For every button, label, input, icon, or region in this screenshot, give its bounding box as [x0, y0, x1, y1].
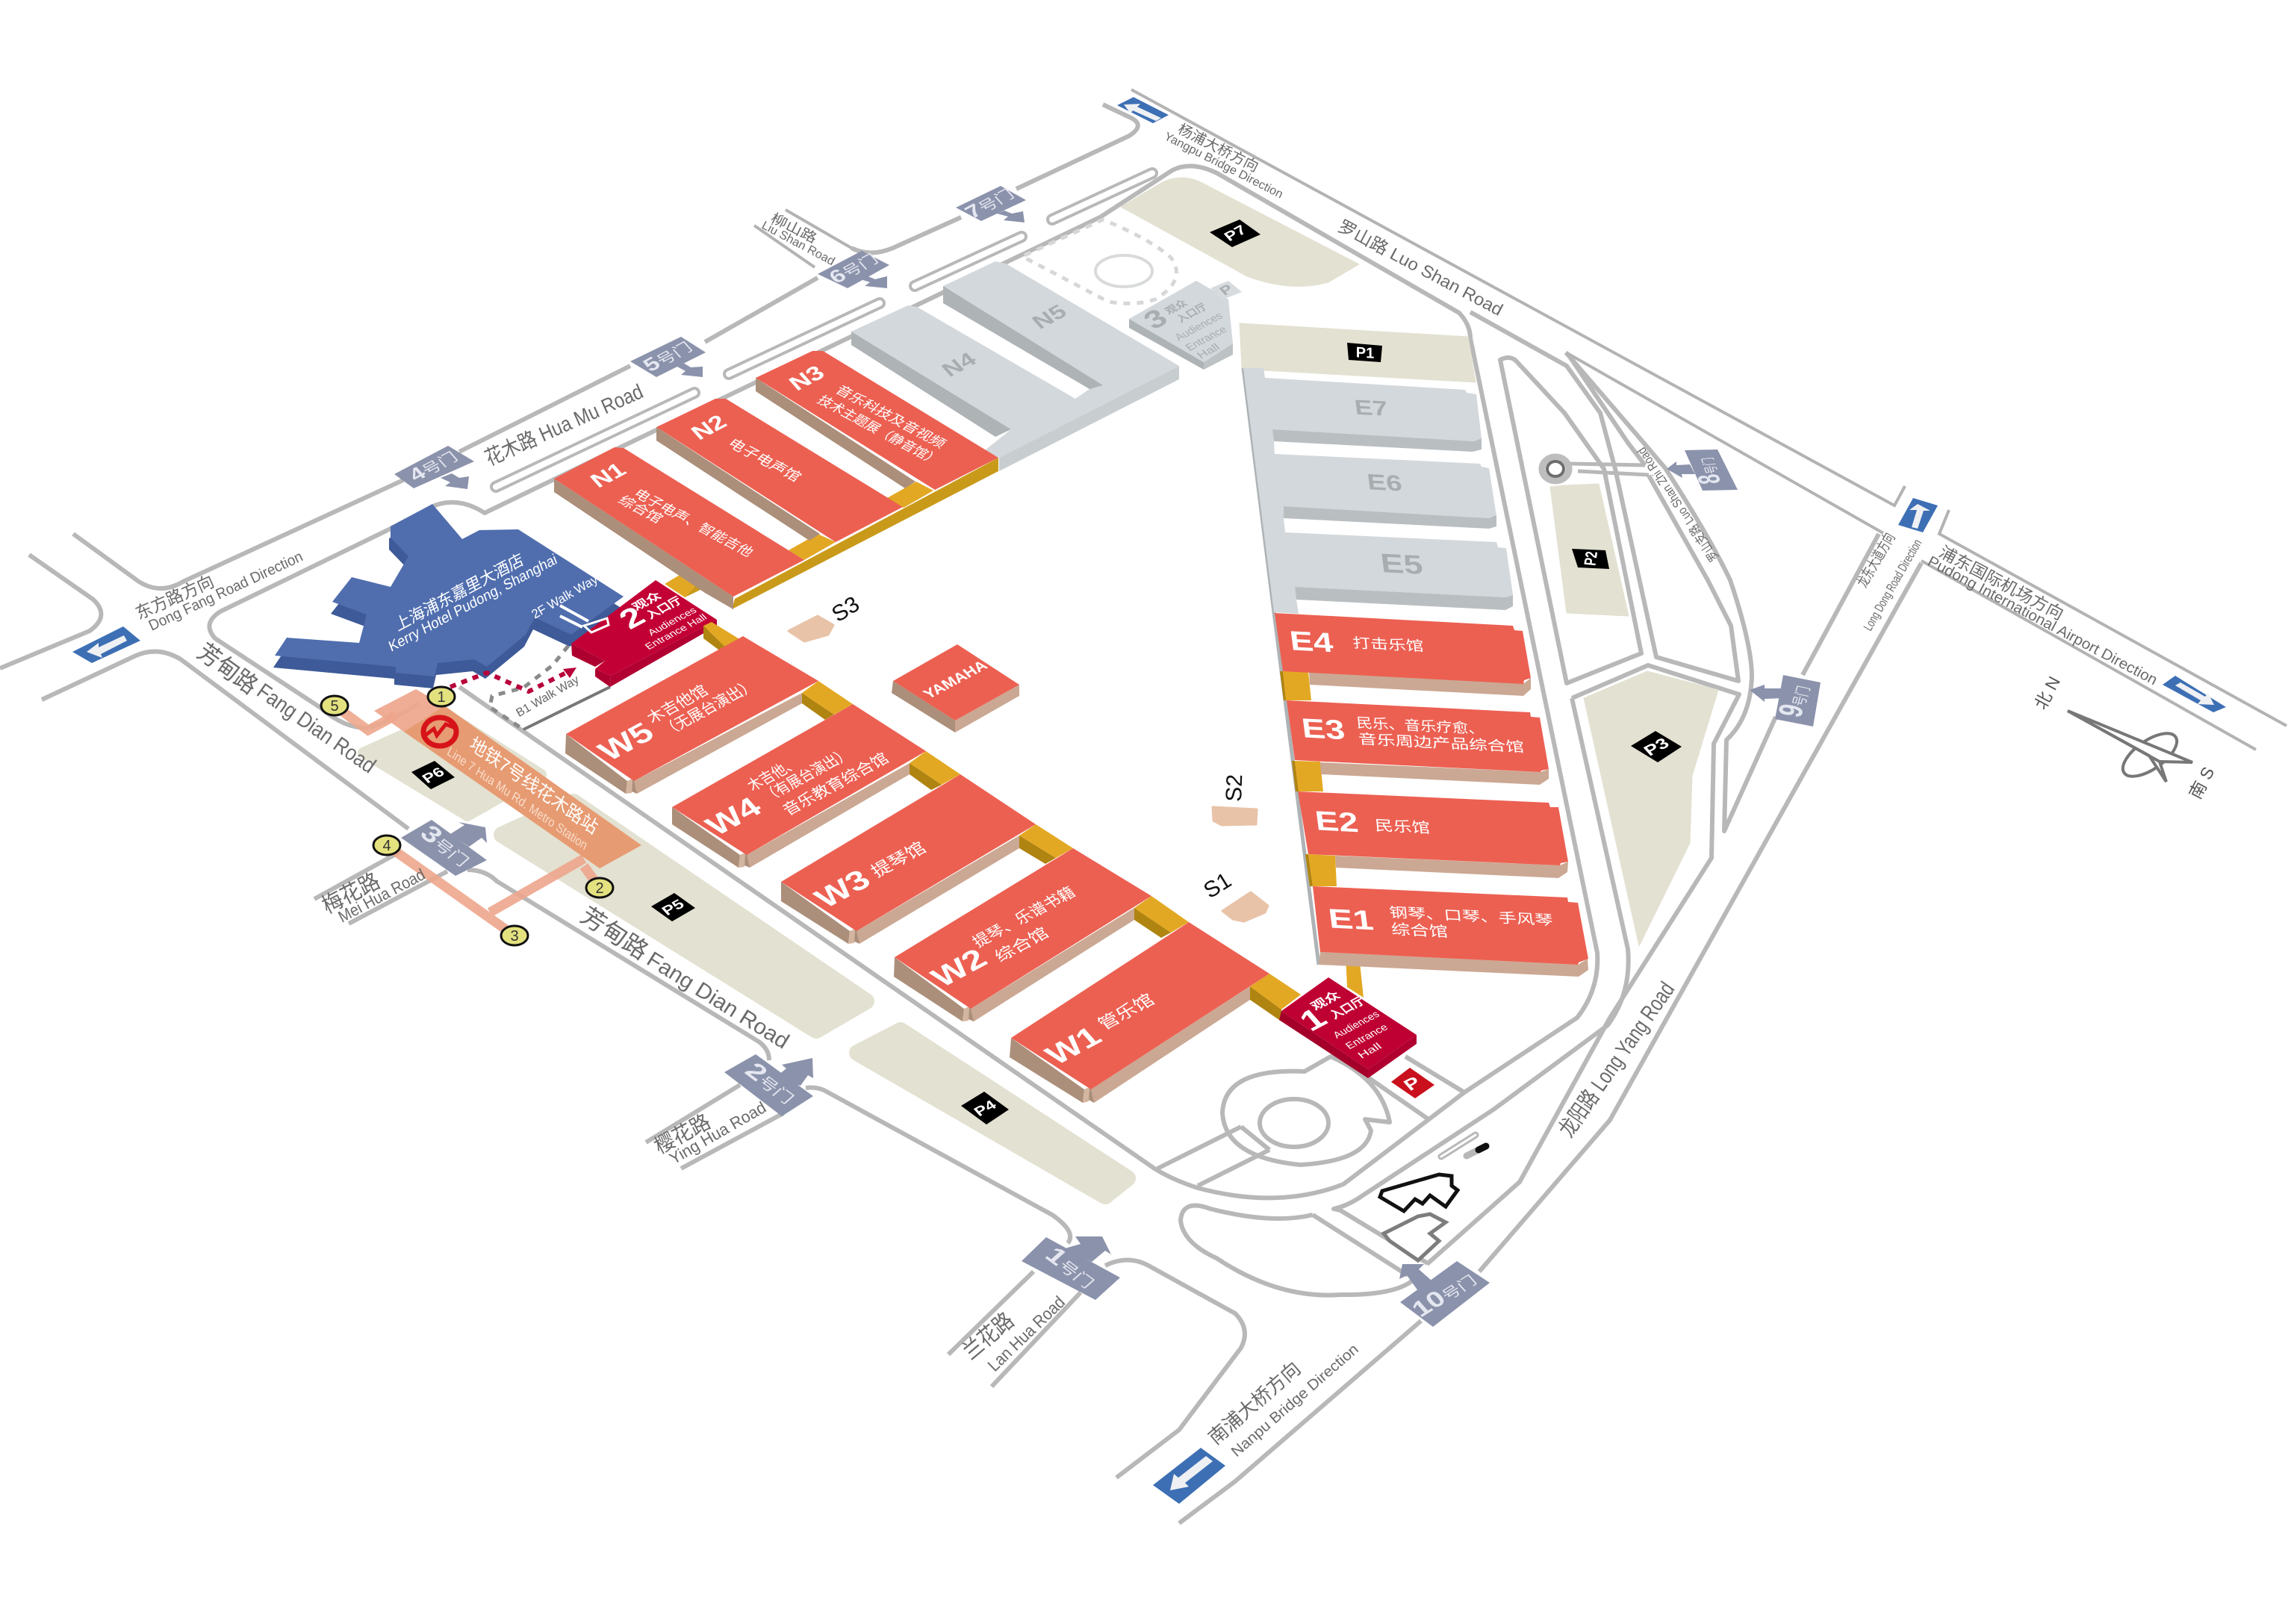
road label: Pudong Airport direction: Pudong International Airport Direction	[1925, 553, 2160, 688]
subway exit 3	[501, 926, 528, 945]
gate 2: 2号门	[739, 1057, 803, 1108]
gate 4	[394, 446, 474, 489]
stage S3	[789, 592, 864, 641]
entrance hall 3	[1129, 281, 1242, 370]
stair icon	[584, 618, 609, 632]
gate 3	[401, 820, 487, 876]
N1 label: N1	[585, 458, 631, 492]
hall 2 English line 2: Entrance Hall	[643, 612, 709, 652]
N4 label: N4	[937, 348, 981, 381]
road label: Yangpu Bridge direction: 杨浦大桥方向	[1175, 121, 1261, 175]
east corridor links	[1280, 671, 1337, 886]
subway exit 4: 4	[382, 838, 391, 854]
hall W5	[565, 636, 818, 794]
gate 5: 5号门	[638, 336, 697, 376]
hall 2 English: Audiences	[646, 606, 699, 638]
hall E2	[1298, 791, 1568, 878]
north label: 北 N	[2030, 673, 2064, 712]
N3 label: N3	[784, 361, 830, 395]
red parking sign	[1391, 1068, 1434, 1098]
hall N2	[656, 399, 903, 542]
station name: 地铁7号线花木路站	[466, 733, 601, 839]
road label: Nanpu Bridge direction: Nanpu Bridge Direction	[1228, 1341, 1362, 1460]
parking sign P3	[1631, 731, 1682, 762]
parking sign P5	[651, 893, 695, 921]
hall 1 title line 2: 入口厅	[1327, 995, 1367, 1021]
hall 1 title: 观众	[1308, 989, 1343, 1012]
hall 3 title line 2: 入口厅	[1174, 301, 1210, 325]
W2 theme line 2: 综合馆	[991, 924, 1052, 965]
hall E1	[1313, 886, 1588, 977]
small parking bays	[1441, 1135, 1486, 1157]
compass	[2030, 673, 2218, 802]
E3 label: E3	[1300, 712, 1346, 745]
stage S1: S1	[1199, 868, 1236, 903]
gate 6: 6号门	[824, 248, 883, 287]
hall W3	[781, 774, 1036, 944]
road label: Fang Dian Road east: 芳甸路	[576, 902, 653, 965]
E3 theme: 民乐、音乐疗愈、	[1356, 715, 1485, 737]
gate 3: 3号门	[414, 820, 479, 871]
road label: Fang Dian Road east	[576, 902, 793, 1054]
subway exit 1: 1	[437, 689, 446, 706]
B1 walkway	[450, 646, 610, 729]
road label: Lan Hua Road	[958, 1292, 1069, 1375]
hall W4	[672, 704, 926, 868]
parking P5	[502, 802, 866, 1030]
halls E5 E6 E7	[1243, 368, 1513, 614]
W2 label: W2	[924, 943, 994, 993]
road label: Dong Fang Road direction: Dong Fang Road Direction	[146, 549, 305, 635]
W3 label: W3	[808, 864, 877, 914]
E3 theme line 2: 音乐周边产品综合馆	[1358, 732, 1525, 755]
N5 label: N5	[1028, 300, 1072, 333]
parking sign P6: P6	[419, 765, 448, 786]
direction arrow: Nanpu Bridge	[1153, 1448, 1225, 1504]
E7 label: E7	[1353, 396, 1389, 420]
parking sign P5: P5	[659, 897, 688, 918]
subway exit 1	[428, 687, 455, 706]
hall 3 number: 3	[1137, 303, 1174, 335]
hall N4 N5	[851, 261, 1179, 471]
road label: Fang Dian Road east: Fang Dian Road	[642, 948, 793, 1054]
road label: Liu Shan Road: Liu Shan Road	[759, 220, 836, 268]
entrance hall 2	[571, 580, 717, 687]
parking sign P2	[1572, 549, 1609, 569]
road label: Long Dong direction: 龙东大道方向	[1853, 530, 1898, 590]
gate 1: 1号门	[1039, 1242, 1104, 1292]
hall N3	[756, 351, 998, 490]
gate 10: 10号门	[1407, 1266, 1482, 1322]
E1 label: E1	[1326, 903, 1375, 936]
station hall	[404, 706, 641, 868]
E2 label: E2	[1314, 805, 1360, 838]
parking P6	[363, 715, 541, 816]
median capsules along Hua Mu Road	[496, 173, 1152, 487]
road label: Luo Shan Road: 罗山路 Luo Shan Road	[1335, 216, 1506, 320]
gate 8	[1667, 449, 1738, 491]
parking P2	[1550, 484, 1629, 616]
hall 1 English line 3: Hall	[1355, 1041, 1384, 1061]
stage S2	[1213, 774, 1257, 825]
hall E3	[1287, 700, 1549, 785]
gate 4: 4号门	[404, 446, 462, 485]
subway exit 2: 2	[595, 880, 604, 897]
road label: Hua Mu Road: 花木路 Hua Mu Road	[482, 379, 647, 470]
road label: Long Dong direction: Long Dong Road Direction	[1861, 537, 1924, 633]
direction arrow: Yangpu Bridge	[1117, 97, 1169, 123]
direction arrow: Pudong Airport	[2163, 676, 2226, 712]
entrance hall 1	[1279, 977, 1417, 1078]
gate 2	[724, 1054, 813, 1116]
parking sign P7: P7	[1221, 223, 1250, 244]
gate 1	[1022, 1236, 1120, 1300]
south label: 南 S	[2185, 764, 2218, 802]
hall 3 title: 观众	[1163, 297, 1190, 317]
building outline: grey	[1384, 1214, 1446, 1260]
plaza circle and dashed path	[1025, 220, 1176, 303]
W4 theme line 3: 音乐教育综合馆	[780, 750, 892, 818]
east hall spine wall	[1243, 368, 1319, 965]
E4 label: E4	[1288, 625, 1335, 658]
stage S2: S2	[1222, 774, 1247, 802]
road label: Lan Hua Road: Lan Hua Road	[983, 1292, 1069, 1375]
connector E1 to entrance 1	[1346, 954, 1364, 998]
hall 1 English line 2: Entrance	[1343, 1022, 1390, 1051]
hall 2 number: 2	[612, 601, 652, 635]
W5 theme line 2: （无展台演出）	[658, 676, 759, 739]
parking sign P7	[1210, 220, 1260, 247]
gate 8: 8号门	[1686, 456, 1728, 485]
hall N1	[554, 447, 804, 609]
W1 label: W1	[1039, 1021, 1108, 1071]
W4 label: W4	[699, 791, 768, 841]
hotel name: 上海浦东嘉里大酒店	[393, 550, 526, 635]
E5 label: E5	[1378, 548, 1425, 580]
parking sign P4: P4	[971, 1098, 1000, 1119]
red parking sign: P	[1400, 1074, 1425, 1095]
north corridor	[665, 458, 998, 609]
west corridor links	[703, 622, 1301, 1021]
parking P7	[1121, 178, 1359, 286]
subway station	[335, 689, 641, 936]
road label: Liu Shan Road: 柳山路	[768, 211, 819, 246]
YAMAHA label: YAMAHA	[920, 657, 991, 702]
roundabout	[1260, 1099, 1328, 1147]
gate 7: 7号门	[960, 183, 1019, 223]
road label: Ying Hua Road: Ying Hua Road	[666, 1098, 769, 1168]
hall YAMAHA	[892, 644, 1019, 732]
W5 theme: 木吉他馆	[644, 682, 712, 727]
stage S1	[1199, 868, 1268, 921]
E2 theme: 民乐馆	[1374, 817, 1431, 836]
hall 1 English: Audiences	[1331, 1009, 1382, 1041]
N3 theme line 2: 技术主题展（静音馆）	[814, 393, 943, 467]
hotel name English: Kerry Hotel Pudong, Shanghai	[387, 551, 559, 656]
road label: Mei Hua Road: Mei Hua Road	[335, 865, 428, 926]
parking sign P1	[1347, 343, 1382, 362]
road label: Fang Dian Road west	[193, 638, 380, 778]
E1 theme line 2: 综合馆	[1390, 921, 1449, 940]
subway exit 5: 5	[330, 698, 339, 715]
road label: Nanpu Bridge direction: 南浦大桥方向	[1204, 1357, 1305, 1449]
N3 theme: 音乐科技及音视频	[832, 383, 949, 451]
road label: Dong Fang Road direction: 东方路方向	[132, 571, 217, 623]
hall 1 number: 1	[1292, 1001, 1334, 1037]
parking P1	[1240, 323, 1476, 382]
road label: Long Yang Road: 龙阳路 Long Yang Road	[1555, 977, 1679, 1142]
roundabout near P2	[1542, 457, 1569, 481]
parking sign P2: P2	[1582, 551, 1602, 567]
subway exit 3: 3	[510, 928, 519, 945]
gate 5	[630, 336, 706, 377]
parking sign P1: P1	[1356, 344, 1374, 362]
road label: Mei Hua Road: 梅花路	[318, 869, 384, 918]
stage S3: S3	[827, 592, 864, 627]
hall 2 title: 观众	[629, 589, 665, 613]
direction arrow: Dong Fang Road	[72, 626, 140, 663]
W1 theme: 管乐馆	[1095, 991, 1158, 1033]
building outline: black	[1380, 1175, 1458, 1211]
hall 2 title line 2: 入口厅	[643, 594, 685, 621]
W2 theme: 提琴、乐谱书籍	[969, 883, 1079, 951]
parking sign P6	[411, 761, 455, 789]
2F walkway label: 2F Walk Way	[529, 572, 600, 622]
hall W2	[894, 848, 1151, 1021]
road label: Ying Hua Road: 樱花路	[650, 1110, 714, 1158]
N1 theme: 电子电声、智能吉他	[630, 487, 756, 559]
road label: Luo Shan Zhi Road: 罗山支路 Luo Shan Zhi Road	[1635, 445, 1721, 564]
entrance corridors	[335, 706, 600, 936]
hall W1	[1010, 922, 1269, 1103]
W4 theme line 2: （有展台演出）	[759, 746, 854, 805]
W4 theme: 木吉他、	[744, 755, 802, 794]
parking P4	[857, 1030, 1128, 1196]
hall 3 English line 3: Hall	[1195, 342, 1222, 361]
2F walkway lines	[560, 606, 588, 627]
gate 9	[1750, 675, 1821, 727]
N2 theme: 电子电声馆	[724, 436, 804, 485]
hotel building	[273, 504, 624, 688]
subway exit 5	[321, 696, 348, 715]
parking sign P3: P3	[1640, 735, 1673, 759]
E1 theme: 钢琴、口琴、手风琴	[1389, 905, 1554, 928]
road label: Fang Dian Road west: Fang Dian Road	[252, 679, 380, 778]
direction arrow: Long Dong Road	[1898, 498, 1938, 532]
N1 theme line 2: 综合馆	[615, 494, 666, 526]
gate 9: 9号门	[1771, 681, 1817, 720]
parking P3	[1584, 671, 1718, 946]
W5 label: W5	[591, 717, 661, 767]
road label: Pudong Airport direction: 浦东国际机场方向	[1936, 542, 2067, 623]
E4 theme: 打击乐馆	[1352, 635, 1425, 654]
road label: Fang Dian Road west: 芳甸路	[193, 638, 263, 700]
road label: Yangpu Bridge direction: Yangpu Bridge Direction	[1162, 130, 1285, 201]
subway exit 2	[586, 878, 613, 897]
B1 walkway label: B1 Walk Way	[515, 673, 582, 720]
hall 3 English line 2: Entrance	[1183, 324, 1229, 353]
road label: Long Dong direction	[1853, 530, 1924, 633]
N2 label: N2	[686, 410, 732, 444]
station name English: Line 7 Hua Mu Rd. Metro Station	[445, 744, 590, 853]
road label: Lan Hua Road: 兰花路	[958, 1308, 1019, 1364]
W3 theme: 提琴馆	[868, 839, 930, 881]
hall 3 English: Audiences	[1172, 311, 1225, 343]
subway exit 4	[373, 836, 400, 855]
parking sign P4	[961, 1092, 1009, 1124]
P tag	[1210, 281, 1242, 299]
hall E4	[1275, 613, 1531, 696]
gate 10	[1399, 1261, 1490, 1327]
E6 label: E6	[1366, 470, 1403, 496]
station entrance block	[374, 689, 444, 732]
P tag letter: P	[1217, 282, 1237, 299]
metro logo	[423, 718, 456, 746]
